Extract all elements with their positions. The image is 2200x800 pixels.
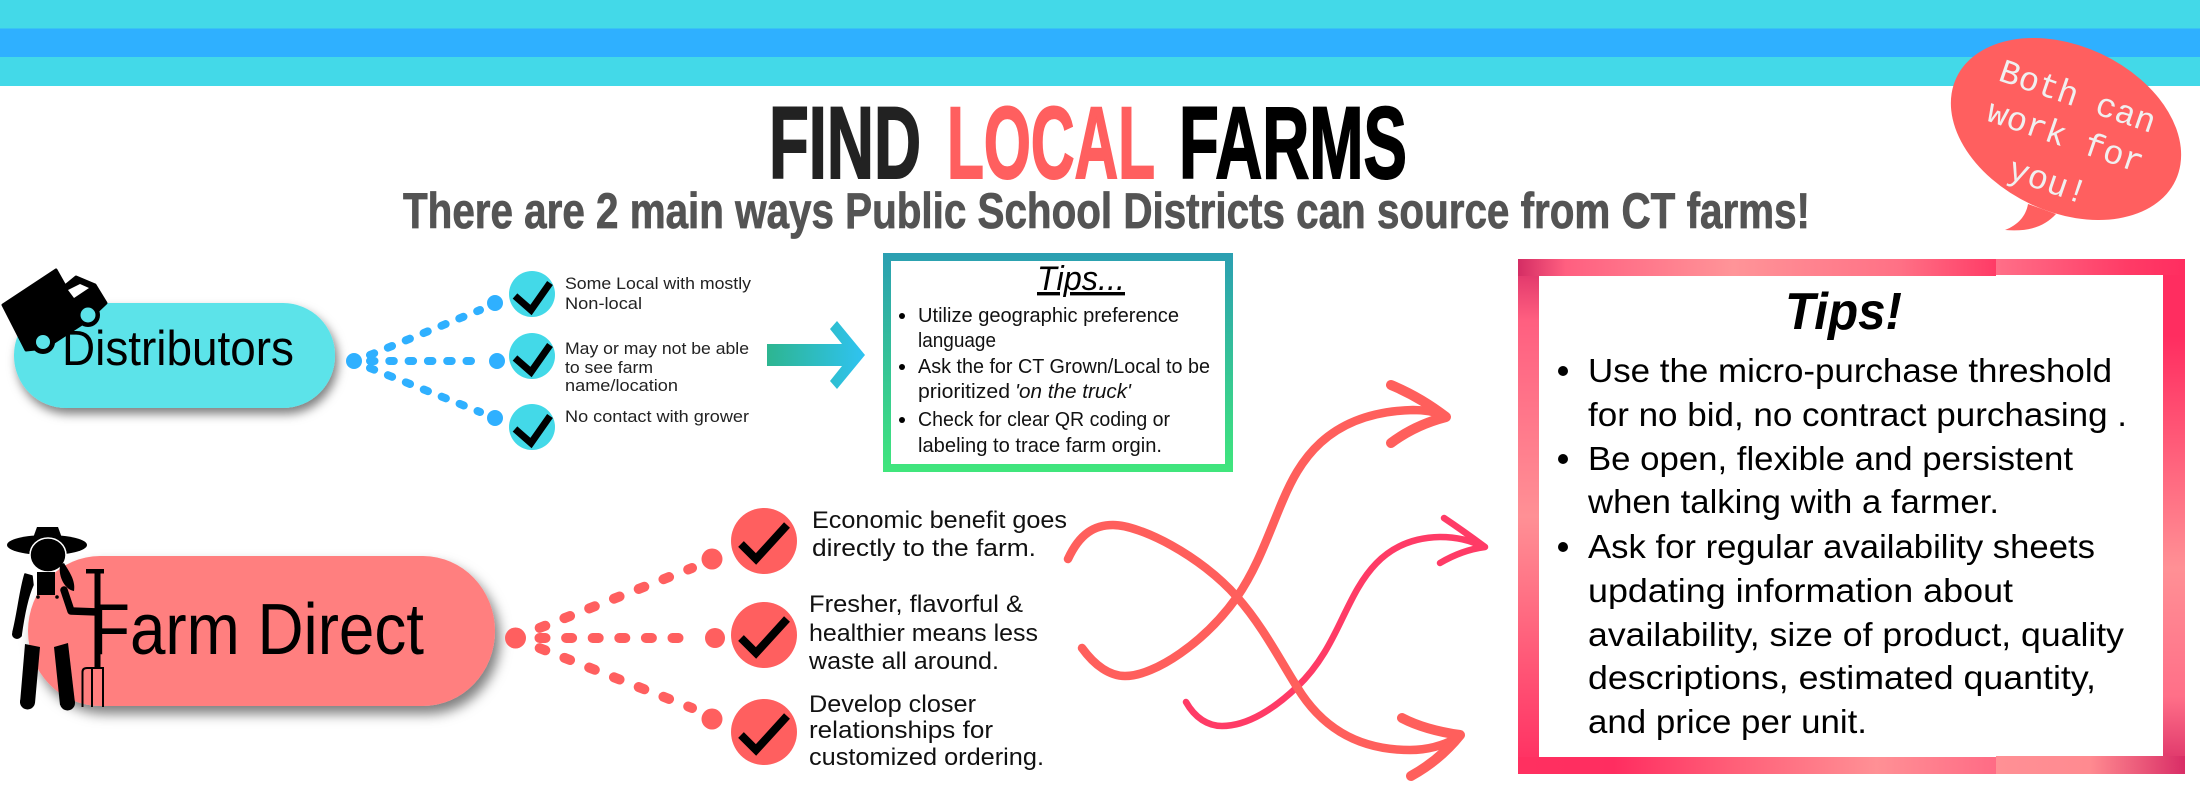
tips list: and price per unit. xyxy=(1588,703,1867,740)
check item: fresher: waste all around. xyxy=(808,648,999,675)
check item: some local: Non-local xyxy=(565,294,642,313)
tips list xyxy=(899,304,1210,457)
distributors pill xyxy=(14,303,335,408)
dotted connectors xyxy=(505,548,725,730)
check item: fresher: Fresher, flavorful & xyxy=(809,591,1023,618)
panel: distributors xyxy=(3,270,752,450)
farm direct label: Farm Direct xyxy=(91,590,424,670)
check item: closer relationships xyxy=(731,691,1044,771)
check item: fresher xyxy=(731,591,1038,675)
panel: distributor tips xyxy=(883,253,1233,472)
tips list: availability, size of product, quality xyxy=(1588,616,2125,653)
arrow: pink xyxy=(1186,518,1485,726)
check item: closer relationships: customized ordering. xyxy=(809,744,1044,771)
title: FIND xyxy=(769,86,921,200)
icon: truck xyxy=(3,270,106,354)
check item: fresher: healthier means less xyxy=(809,620,1038,647)
check item: farm name xyxy=(509,333,749,395)
panel: farm direct xyxy=(7,507,1067,771)
speech bubble: both can work for you: Both can xyxy=(1993,54,2160,144)
panel: farm direct tips xyxy=(1518,259,2185,774)
check item: economic benefit xyxy=(731,507,1067,574)
tips list: Ask for regular availability sheets xyxy=(1588,528,2095,565)
tips list: updating information about xyxy=(1588,572,2013,609)
tips heading: Tips... xyxy=(1037,260,1125,298)
check item: farm name: May or may not be able xyxy=(565,339,749,358)
check item: economic benefit: Economic benefit goes xyxy=(812,507,1067,534)
tips list: for no bid, no contract purchasing . xyxy=(1588,396,2127,433)
check item: closer relationships: Develop closer xyxy=(809,691,976,718)
tips list: descriptions, estimated quantity, xyxy=(1588,659,2096,696)
icon: farmer with pitchfork xyxy=(7,527,104,710)
check item: farm name: name/location xyxy=(565,376,678,395)
tips list: Use the micro-purchase threshold xyxy=(1588,352,2112,389)
check item: some local: Some Local with mostly xyxy=(565,274,752,293)
tips list: 'on the truck' xyxy=(1015,380,1132,403)
tips heading: Tips! xyxy=(1785,283,1902,341)
crossing arrows xyxy=(1068,385,1485,776)
check item: no contact xyxy=(509,404,749,450)
farm direct pill xyxy=(28,556,495,706)
tips list: Check for clear QR coding or xyxy=(918,408,1170,431)
check item: some local xyxy=(509,271,752,317)
title xyxy=(769,86,1407,200)
tips list: Be open, flexible and persistent xyxy=(1588,440,2073,477)
tips list: when talking with a farmer. xyxy=(1587,483,1999,520)
speech bubble: both can work for you: work for xyxy=(1981,94,2148,184)
title: LOCAL xyxy=(947,86,1155,200)
dotted connectors xyxy=(346,295,505,426)
check item: economic benefit: directly to the farm. xyxy=(812,535,1036,562)
distributors label: Distributors xyxy=(62,322,294,376)
check item: no contact: No contact with grower xyxy=(565,407,749,426)
tips list: Ask the for CT Grown/Local to be xyxy=(918,355,1210,378)
top banner stripes xyxy=(0,0,2200,86)
subtitle: There are 2 main ways Public School Districts can source from CT farms! xyxy=(403,183,1810,239)
check item: farm name: to see farm xyxy=(565,358,653,377)
speech bubble: both can work for you xyxy=(1921,3,2200,255)
arrow: coral up xyxy=(1082,385,1446,676)
tips list: Utilize geographic preference xyxy=(918,304,1179,327)
tips list: prioritized xyxy=(918,380,1010,403)
check item: closer relationships: relationships for xyxy=(809,717,993,744)
tips list xyxy=(1558,352,2127,740)
arrow: coral down xyxy=(1068,525,1460,776)
speech bubble: both can work for you: you! xyxy=(2002,152,2092,215)
tips list: language xyxy=(918,329,996,352)
title: FARMS xyxy=(1179,86,1407,200)
tips list: labeling to trace farm orgin. xyxy=(918,434,1162,457)
arrow: distributors to tips xyxy=(767,321,865,389)
